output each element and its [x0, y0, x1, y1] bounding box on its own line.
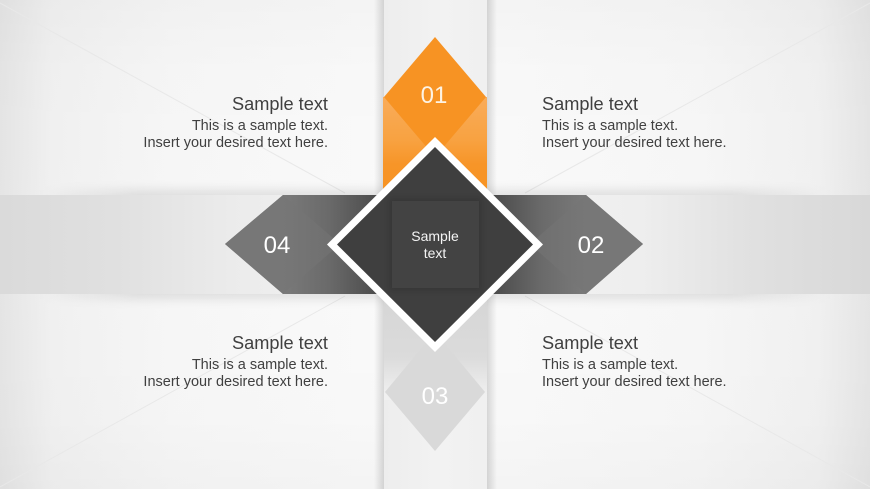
number 04: 04	[264, 232, 290, 259]
text block bottom left	[143, 333, 328, 390]
arrow 01: orange	[383, 37, 487, 193]
arrow 02: grey	[486, 195, 643, 294]
text block top right: Sample text	[542, 94, 638, 114]
text block top left: This is a sample text.	[192, 118, 328, 134]
horizontal band	[0, 190, 870, 299]
arrow 03: light grey	[384, 300, 487, 451]
number 01: 01	[421, 82, 447, 109]
center label: Sample	[411, 228, 459, 244]
text block top left: Sample text	[232, 94, 328, 114]
center diamond	[327, 137, 543, 352]
center square	[392, 201, 479, 288]
text block top right: This is a sample text.	[542, 118, 678, 134]
text block bottom left: Insert your desired text here.	[143, 374, 328, 390]
number 03: 03	[422, 383, 448, 410]
center label line 2: text	[424, 245, 446, 261]
arrow 04: grey	[225, 195, 385, 294]
center square shadow	[389, 198, 482, 291]
text block top right	[542, 94, 727, 151]
text block bottom right	[542, 333, 727, 390]
text block top left	[143, 94, 328, 151]
text block top left: Insert your desired text here.	[143, 135, 328, 151]
text block bottom right: Sample text	[542, 333, 638, 353]
text block top right: Insert your desired text here.	[542, 135, 727, 151]
text block bottom left: This is a sample text.	[192, 357, 328, 373]
vertical band	[374, 0, 497, 489]
number 02: 02	[578, 232, 604, 259]
text block bottom left: Sample text	[232, 333, 328, 353]
text block bottom right: Insert your desired text here.	[542, 374, 727, 390]
text block bottom right: This is a sample text.	[542, 357, 678, 373]
